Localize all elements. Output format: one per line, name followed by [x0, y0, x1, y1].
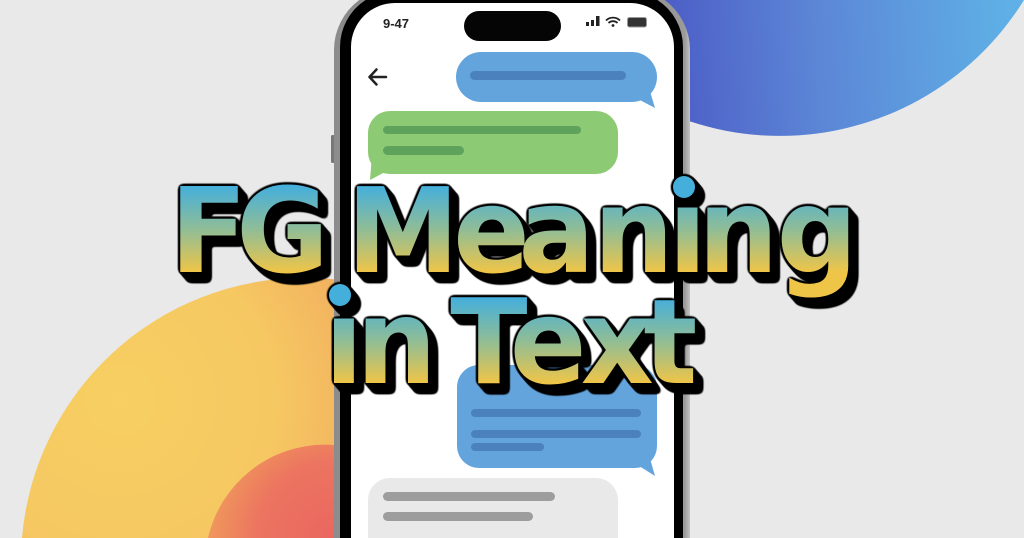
decorative yellow circle: [22, 278, 588, 538]
decorative red circle: [208, 445, 442, 538]
status time: 9-47: [383, 16, 409, 31]
phone frame: [334, 0, 690, 538]
gray bubble: [368, 478, 618, 538]
status icons: [586, 16, 646, 27]
dynamic island: [464, 11, 561, 41]
decorative blue circle: [536, 0, 1024, 136]
blue bubble bottom: [457, 365, 657, 476]
phone screen: [351, 3, 674, 538]
blue bubble top: [456, 52, 657, 108]
title: FG Meaning: [170, 164, 858, 301]
phone side button: [331, 135, 335, 163]
title: in Text: [324, 275, 697, 412]
phone: [331, 0, 690, 538]
title: [177, 173, 860, 397]
green bubble: [368, 111, 618, 180]
back arrow: [370, 70, 386, 84]
